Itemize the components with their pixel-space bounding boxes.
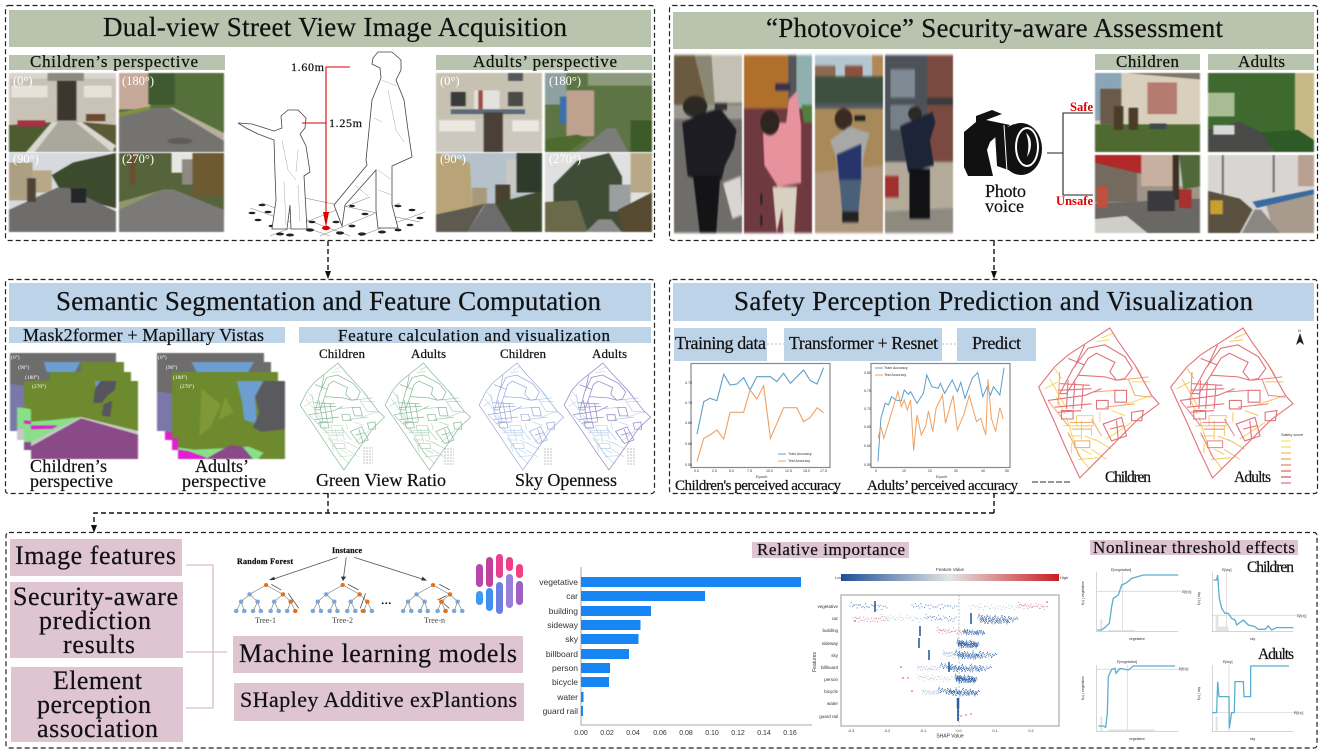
chart: adults' accuracy curve: 0.80 [864,371,871,375]
photo: man photographing building [884,53,954,235]
caption: adults' perspective: perspective [182,471,266,491]
photo: children 0 degrees [9,73,116,152]
chart: children's accuracy curve: 15.0 [803,469,810,473]
chart: feature importance bars: car [566,591,578,601]
label: features axis: Features [812,652,818,672]
chart: adults vegetation threshold: E[vegetative] [1117,660,1137,664]
chart: adults' accuracy curve: 0.55 [864,463,871,467]
heading: dual-view acquisition: Dual-view Street View Image Acquisition [103,12,568,42]
sub-heading: children: Children [1116,52,1180,71]
icon: gradient bars logo [476,554,523,614]
chart: children's accuracy curve: 12.5 [785,469,792,473]
chart: feature importance bars: vegetative [539,577,578,587]
sub-heading: adults' perspective [436,52,652,71]
photo: child photographing park [814,53,884,235]
box: element perception association [11,666,183,743]
label: photo voice [985,181,1026,216]
chart: adults' accuracy curve: 0.60 [864,444,871,448]
chart: shap beeswarm: -0.3 [848,729,854,733]
chart: shap beeswarm: 0.1 [992,729,998,733]
chart: shap beeswarm: bicycle [824,689,838,694]
panel: safety perception prediction [670,280,1318,494]
chart: adults' accuracy curve: 0 [875,469,877,473]
chart: feature importance bars: bicycle [552,677,578,687]
heading: relative importance: Relative importance [757,540,905,559]
chart: children's accuracy curve: 0.0 [694,469,699,473]
chart: adults vegetation threshold: f(x) | vegetative [1081,676,1085,700]
box: shapley additive explantions: SHapley Additive exPlantions [240,687,517,712]
chart: children vegetation threshold: vegetative [1129,637,1145,641]
segmentation stack: adults [157,353,285,459]
chart: adults' accuracy curve: 0.70 [864,407,871,411]
connector: inputs to models [186,565,227,708]
chart: children's accuracy curve: 5.0 [729,469,734,473]
label: 270 degree layer: (270°) [32,383,46,390]
measure arrow tip [322,212,330,230]
heading: safety perception prediction [673,283,1314,321]
chart: children's accuracy curve [685,364,830,479]
caption: adults' perspective: Adults’ [195,456,249,476]
chart: adults sky threshold: sky [1250,737,1256,741]
arrow: acquisition to segmentation [325,241,331,279]
label: 0 degree layer: (0°) [11,354,20,361]
map: safety children [1039,328,1159,478]
label: random forest: Random Forest [237,557,293,566]
label: tree-n: Tree-n [424,616,445,625]
chart: adults sky threshold: E[sky] [1223,660,1233,664]
chart: children's accuracy curve: 0.75 [685,381,692,385]
photo: adult photographing street [673,53,743,235]
label: adults 90 degrees: (90°) [440,152,466,166]
chart: shap beeswarm: -0.2 [884,729,890,733]
label: tree-2: Tree-2 [332,616,353,625]
box: transformer + resnet [784,328,942,361]
photo: adults safe [1207,72,1315,153]
chart: children's accuracy curve: 0.70 [685,401,692,405]
chart: children's accuracy curve: Train Accuracy [788,452,812,456]
heading: nonlinear threshold effects: Nonlinear threshold effects [1093,538,1295,557]
chart: feature importance bars: guard rail [543,706,578,716]
map: safety adults [1171,328,1293,478]
label: 90 degree layer: (90°) [18,364,30,371]
photo: children safe [1094,72,1201,153]
panel: semantic segmentation and feature computation [6,280,664,494]
sub-heading: adults [1208,52,1314,71]
label: 90 degrees: (90°) [13,152,39,166]
figure: adult [334,52,412,228]
chart: adults' accuracy curve: Train Accuracy [884,366,908,370]
sub-heading: adults' perspective: Adults’ perspective [473,52,617,71]
colour bar [841,574,1059,581]
chart: adults' accuracy curve: 30 [954,469,958,473]
label: adults 90 degree layer: (90°) [166,364,178,371]
label: unsafe: Unsafe [1056,194,1093,208]
labels above maps: Adults [411,346,446,361]
label: safe: Safe [1070,100,1093,114]
chart: feature importance bars: billboard [546,649,578,659]
heading: photovoice assessment: “Photovoice” Security-aware Assessment [766,13,1223,43]
chart: adults sky threshold: f(x) | sky [1197,687,1201,700]
photo: adults 0 degrees [436,73,542,152]
map legends [363,448,636,464]
chart: shap beeswarm: 0.2 [1028,729,1034,733]
label: adults 180 degrees: (180°) [549,74,581,88]
chart: shap beeswarm: person [824,677,838,682]
chart: children sky threshold: f(x) | sky [1197,592,1201,605]
caption: children's perceived accuracy: Children's perceived accuracy [675,478,842,494]
heading: photovoice assessment [673,12,1314,49]
chart: adults' accuracy curve: 50 [1005,469,1009,473]
figure: child [238,110,310,229]
chart: feature importance bars: 0.14 [757,730,771,737]
chart: adults vegetation threshold: E[f(x)] [1179,667,1188,671]
map: sky openness children [469,363,577,470]
label: adults 180 degree layer: (180°) [173,374,187,381]
box: shapley additive explantions [234,683,524,721]
chart: adults sky threshold [1197,660,1303,741]
chart: children's accuracy curve: Epoch [756,474,767,479]
box: training data: Training data [675,333,766,353]
label: adults 0 degree layer: (0°) [158,354,167,361]
caption: adults' perspective [182,456,266,491]
label: photo voice: Photo [985,181,1026,201]
chart: adults vegetation threshold [1081,660,1188,741]
label: threshold adults: Adults [1258,646,1294,663]
map: green view ratio adults [375,363,484,470]
photo: adults unsafe [1207,154,1315,234]
diagram: random forest [234,546,464,625]
panel: dual-view street view image acquisition [6,6,654,240]
heading: semantic segmentation [9,283,651,321]
chart: children's accuracy curve: 0.65 [685,421,692,425]
chart: feature importance bars: person [552,663,578,673]
chart: children vegetation threshold: f(x) | vegetative [1081,581,1085,605]
chart: feature importance bars: 0.16 [783,730,797,737]
labels above maps [319,346,627,361]
chart: adults' accuracy curve: Test Accuracy [884,373,906,377]
measure: red height lines [302,67,350,220]
chart: feature importance bars: 0.02 [600,730,614,737]
arrow: photovoice to prediction [991,241,997,279]
chart: feature importance bars: 0.06 [653,730,667,737]
box: security-aware prediction results: results [63,630,135,659]
chart: children vegetation threshold: E[vegetative] [1111,568,1131,572]
label: feature value: Feature Value [936,567,964,572]
chart: shap beeswarm: sky [831,653,839,658]
label: map adults: Adults [1234,469,1271,486]
label: ellipsis: ... [381,593,392,608]
scale bar [1032,481,1072,483]
photo: child in pink coat [743,53,813,235]
icon: camera [964,110,1042,176]
photo: adults 270 degrees [545,152,652,232]
chart: children's accuracy curve: 2.5 [712,469,717,473]
box: predict [957,328,1036,361]
chart: adults' accuracy curve: 0.75 [864,389,871,393]
chart: feature importance bars: 0.12 [731,730,745,737]
caption: adults' perceived accuracy: Adults’ perceived accuracy [867,478,1018,494]
heading: safety perception prediction: Safety Perception Prediction and Visualization [734,286,1254,316]
sub-heading: children's perspective: Children’s perspective [30,52,198,71]
chart: feature importance bars: 0.04 [626,730,640,737]
caption: sky openness: Sky Openness [515,470,617,490]
box: security-aware prediction results: Security-aware [13,582,178,611]
chart: feature importance bars: sky [565,634,579,644]
chart: children sky threshold: E[sky] [1222,568,1232,572]
box: machine learning models: Machine learning models [239,639,517,668]
legend: safety score: Safety score [1281,432,1304,437]
box: element perception association: Element [53,666,143,695]
photo: children unsafe [1094,154,1201,234]
chart: children's accuracy curve: 7.5 [747,469,752,473]
photo: children 90 degrees [9,152,116,232]
box: training data [674,328,767,361]
label: adults 270 degree layer: (270°) [180,383,194,390]
map: sky openness adults [554,363,664,470]
icon: north arrow: N [1298,328,1301,333]
label: adults 0 degrees: (0°) [440,74,460,88]
box: transformer + resnet: Transformer + Resnet [789,333,938,353]
chart: adults' accuracy curve [864,364,1010,479]
chart: adults' accuracy curve: 0.65 [864,425,871,429]
chart: feature importance bars: water [556,692,578,702]
chart: shap beeswarm: High [1060,575,1068,580]
caption: green view ratio: Green View Ratio [316,470,446,490]
photo: adults 180 degrees [545,73,652,152]
box: security-aware prediction results: prediction [39,606,151,635]
chart: shap beeswarm: Low [835,575,842,580]
chart: children vegetation threshold: E[f(x)] [1182,590,1191,594]
photo: adults 90 degrees [436,152,542,232]
heading: dual-view acquisition [9,10,651,47]
chart: children's accuracy curve: 0.55 [685,463,692,467]
chart: children's accuracy curve: 17.5 [820,469,827,473]
chart: adults sky threshold: E[f(x)] [1294,711,1303,715]
sub-heading: mask2former: Mask2former + Mapillary Vistas [23,325,264,345]
label: threshold children: Children [1247,559,1294,576]
chart: children vegetation threshold [1081,568,1191,641]
chart: shap beeswarm: building [822,628,838,633]
icon: north arrow [1296,328,1304,345]
chart: shap beeswarm: sideway [822,641,839,646]
label: instance: Instance [332,546,362,555]
photo: children 180 degrees [119,73,224,152]
chart: shap beeswarm: billboard [821,665,838,670]
chart: shap beeswarm: -0.1 [920,729,926,733]
chart: children's accuracy curve: 0.60 [685,442,692,446]
illustration: child and adult eye heights [238,52,425,236]
chart: children sky threshold: sky [1250,637,1256,641]
photo: children 270 degrees [119,152,224,232]
label: 270 degrees: (270°) [122,152,154,166]
label: tree-1: Tree-1 [255,616,276,625]
label: child height: 1.25m [329,116,363,130]
label: 180 degree layer: (180°) [25,374,39,381]
heading: semantic segmentation: Semantic Segmentation and Feature Computation [56,286,602,316]
box: image features: Image features [15,541,176,570]
labels above maps: Children [500,346,546,361]
chart: feature importance bars: sideway [547,620,579,630]
chart: feature importance bars [539,567,812,737]
chart: adults' accuracy curve: Epoch [936,474,947,479]
chart: adults' accuracy curve: 40 [981,469,985,473]
chart: shap beeswarm: car [832,616,838,621]
sub-heading: feature calculation: Feature calculation and visualization [338,326,610,345]
label: shap value: SHAP Value [936,734,964,740]
box: element perception association: association [37,714,158,743]
labels above maps: Adults [592,346,627,361]
chart: feature importance bars: 0.10 [705,730,719,737]
map: green view ratio children [290,363,398,470]
chart: children sky threshold: E[f(x)] [1297,614,1306,618]
floor grid [248,197,425,236]
chart: adults' accuracy curve: 10 [902,469,906,473]
chart: shap beeswarm: 0.0 [956,729,962,733]
chart: feature importance bars: 0.08 [679,730,693,737]
sub-heading: children [1095,52,1200,71]
label: adult height: 1.60m [291,60,325,74]
legend: safety score [1281,432,1304,483]
box: element perception association: perception [37,690,151,719]
chart: feature importance bars: building [549,606,578,616]
caption: children's perspective: Children’s [30,456,107,476]
label: adults 270 degrees: (270°) [549,152,581,166]
sub-heading: adults: Adults [1238,52,1285,71]
chart: adults' accuracy curve: 20 [928,469,932,473]
chart: shap beeswarm: water [827,701,838,706]
chart: adults vegetation threshold: vegetative [1129,737,1145,741]
panel: photovoice assessment [670,6,1318,240]
labels above maps: Children [319,346,366,361]
chart: children sky threshold [1197,568,1306,641]
chart: feature importance bars: 0.00 [574,730,588,737]
box: predict: Predict [972,333,1021,353]
label: photo voice: voice [985,196,1024,216]
label: 180 degrees: (180°) [122,74,154,88]
chart: shap beeswarm: guard rail [819,714,838,719]
caption: children's perspective [30,456,113,491]
caption: children's perspective: perspective [30,471,113,491]
chart: children's accuracy curve: Test Accuracy [788,459,810,463]
chart: shap beeswarm: vegetative [817,604,838,609]
connector: safe and unsafe [1047,113,1093,195]
box: security-aware prediction results [10,582,183,659]
label: map children: Children [1105,469,1151,486]
chart: shap beeswarm [812,567,1068,740]
arrow: merged flow to analysis panel [91,493,994,533]
label: 0 degrees: (0°) [13,74,33,88]
chart: children's accuracy curve: 10.0 [766,469,773,473]
panel: machine learning analysis [6,532,1317,748]
segmentation stack: children [10,353,138,459]
